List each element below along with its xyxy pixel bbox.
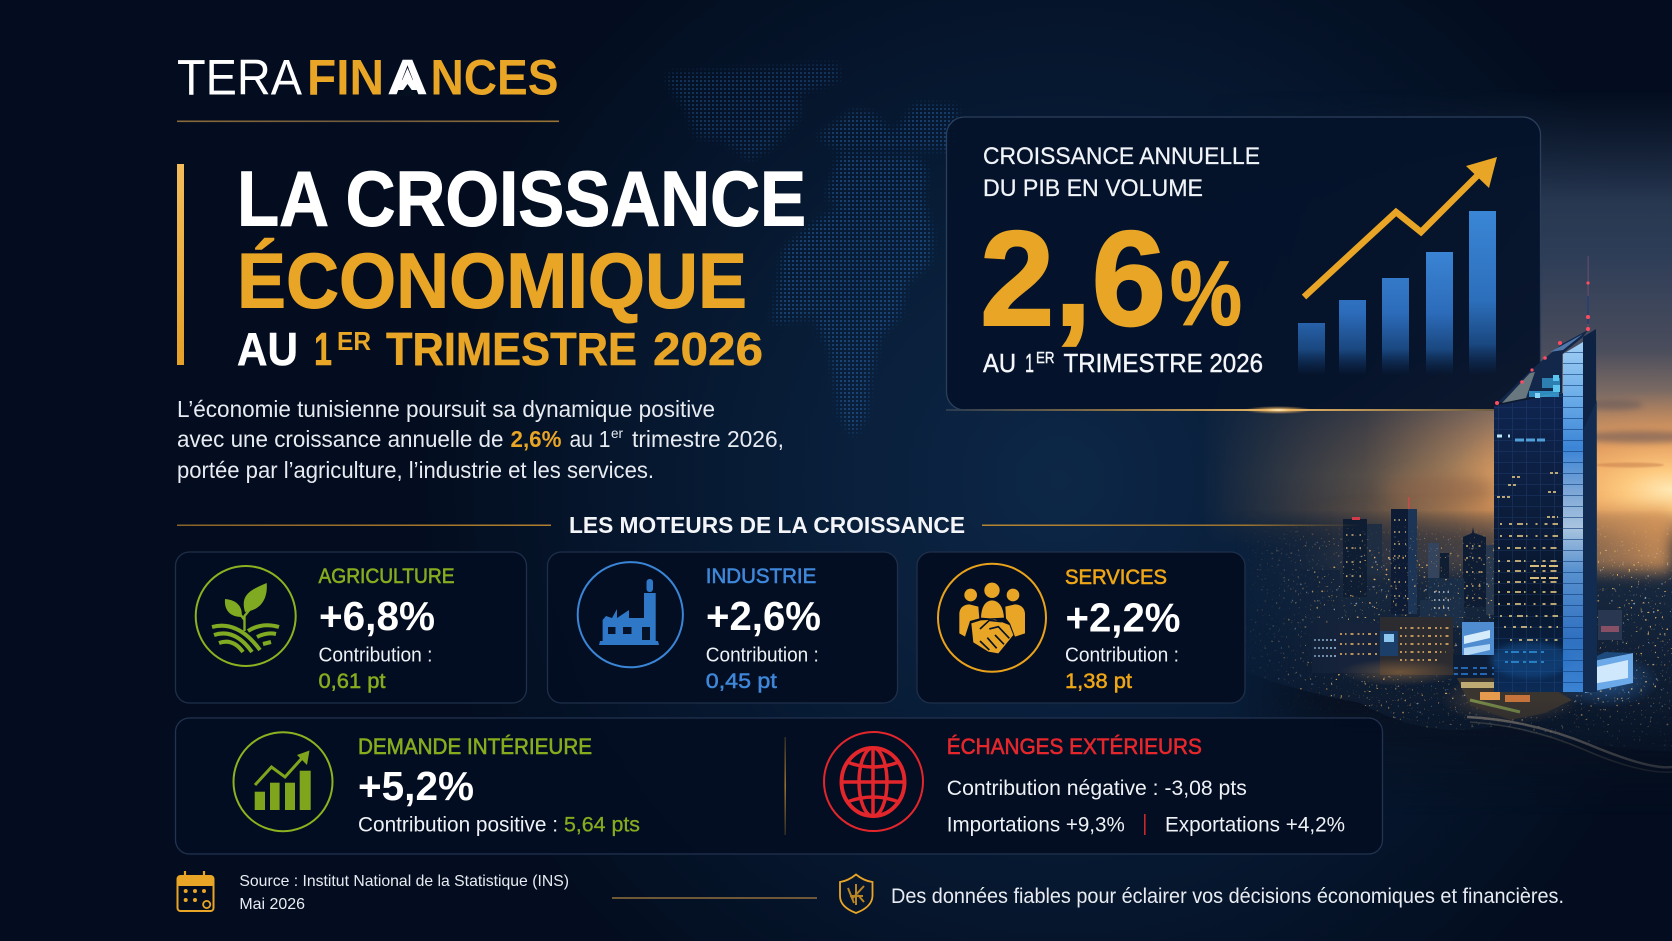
tower lit windows [1497,436,1558,662]
logo: FIN [307,50,384,106]
panel: GDP growth [946,117,1540,414]
panel: industrie [548,552,898,703]
low-rise blocks [1312,610,1622,681]
big number: % [1170,243,1242,345]
footer source: Mai 2026 [239,896,305,913]
demand block: 5,64 pts [564,814,640,836]
panel: agriculture: Contribution : [318,644,432,666]
panel: services: SERVICES [1065,565,1167,589]
demand block: Contribution positive : [358,814,558,836]
main tower [1490,256,1597,692]
intro paragraph: trimestre 2026, [632,426,784,452]
big number: 2,6 [980,203,1166,354]
trade block: ÉCHANGES EXTÉRIEURS [947,734,1202,759]
period label: TRIMESTRE 2026 [1064,348,1263,378]
dark trees [1240,676,1672,775]
world map dotted [664,60,960,438]
intro paragraph: L’économie tunisienne poursuit sa dynamique positive [177,396,715,422]
mall and road [1340,652,1672,772]
panel: services: 1,38 pt [1065,670,1132,693]
panel: agriculture: +6,8% [319,593,435,639]
intro paragraph [177,396,784,483]
icon: shield [840,874,872,913]
demand block [234,732,640,836]
sunset sky [1220,114,1672,550]
title: AU [237,323,298,375]
trade block: Contribution négative : -3,08 pts [947,777,1247,800]
footer tagline: Des données fiables pour éclairer vos décisions économiques et financières. [891,885,1564,908]
panel: industrie: Contribution : [706,644,819,666]
heading: DU PIB EN VOLUME [983,175,1203,202]
panel: services [917,552,1245,703]
period label: AU [983,348,1016,378]
intro paragraph: er [611,425,623,441]
icon: handshake [938,564,1046,672]
icon: plant [196,566,296,666]
logo [177,50,558,106]
period label: ER [1036,350,1054,367]
panel: services: +2,2% [1066,594,1180,640]
footer source: Source : Institut National de la Statistique (INS) [239,873,569,890]
title: LA CROISSANCE [237,154,806,242]
heading: CROISSANCE ANNUELLE [983,143,1260,170]
arrow [1304,157,1497,297]
intro paragraph: 2,6% [510,426,562,452]
panel: industrie: +2,6% [706,593,821,639]
footer source [178,871,569,913]
panel: demand and trade [176,718,1382,854]
panel: agriculture [176,552,526,703]
intro paragraph: au 1 [570,426,610,452]
trade block: Importations +9,3% [947,814,1125,836]
title: TRIMESTRE [386,323,637,375]
trade block: Exportations +4,2% [1165,814,1345,836]
title: 1 [314,323,332,375]
icon: factory [578,562,683,667]
panel: industrie: INDUSTRIE [706,564,816,588]
title: ÉCONOMIQUE [237,236,747,324]
logo: A [387,50,428,106]
period label [983,348,1263,378]
lights [1244,525,1672,750]
icon: globe [824,732,923,831]
city skyline [1244,497,1672,773]
demand block: +5,2% [358,763,474,809]
icon: growth chart [234,732,332,831]
footer tagline [840,874,1564,913]
lit skyscrapers in the distance [1330,497,1494,628]
panel: agriculture: AGRICULTURE [318,564,454,588]
bar chart [1298,211,1496,374]
title: 2026 [653,323,763,375]
heading [983,143,1260,202]
red beacon lights [1495,281,1590,405]
panel: services: Contribution : [1065,644,1179,666]
title [177,154,806,375]
panel: industrie: 0,45 pt [706,670,777,693]
period label: 1 [1025,348,1034,378]
title: ER [337,326,371,356]
panel: agriculture: 0,61 pt [318,670,386,693]
logo: NCES [430,50,558,106]
logo: TERA [177,50,303,106]
icon: calendar [178,871,214,911]
section heading: LES MOTEURS DE LA CROISSANCE [569,512,965,538]
intro paragraph: avec une croissance annuelle de [177,426,504,452]
intro paragraph: portée par l’agriculture, l’industrie et les services. [177,457,654,483]
trade block [824,732,1345,836]
demand block: DEMANDE INTÉRIEURE [358,734,592,759]
